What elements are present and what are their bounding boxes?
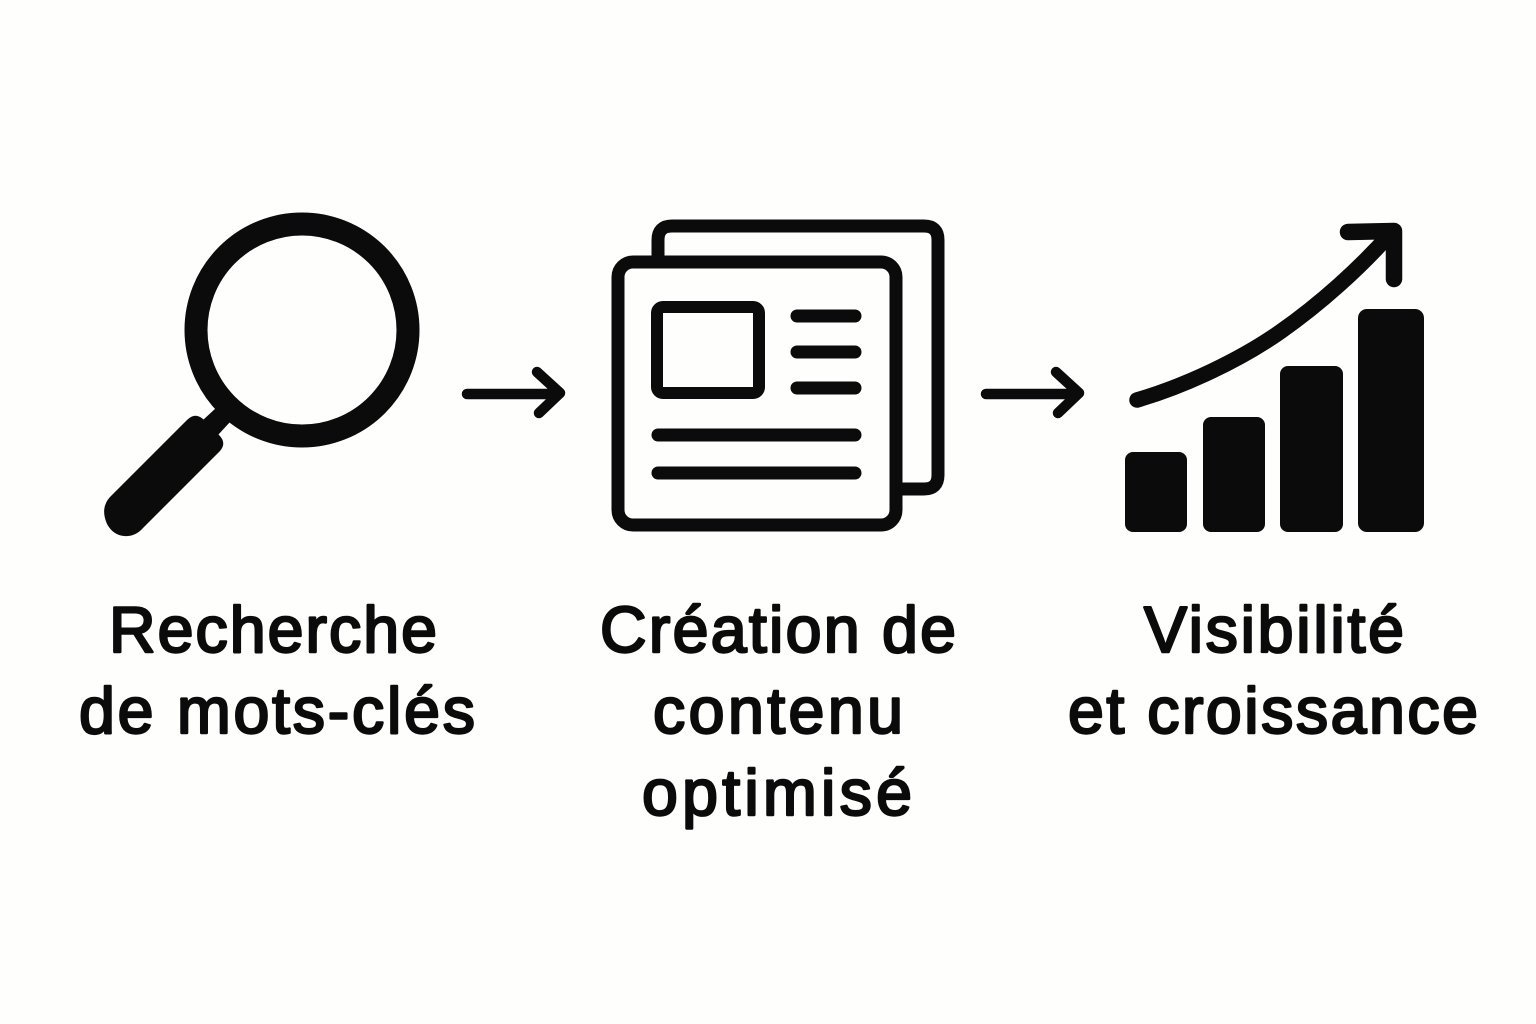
- label: Création de contenu optimisé: [600, 594, 956, 829]
- label: Visibilité et croissance: et croissance: [1068, 675, 1478, 747]
- arrow: step 2 to step 3: [986, 372, 1079, 413]
- icon: content document: [618, 226, 938, 525]
- label: Recherche de mots-clés: Recherche: [109, 594, 437, 666]
- label: Visibilité et croissance: Visibilité: [1144, 594, 1404, 666]
- arrow: step 1 to step 2: [467, 372, 560, 413]
- icon: growth bar chart: [1125, 231, 1424, 532]
- label: Création de contenu optimisé: contenu: [653, 675, 903, 747]
- label: Recherche de mots-clés: de mots-clés: [79, 675, 475, 747]
- label: Recherche de mots-clés: [79, 594, 475, 747]
- label: Création de contenu optimisé: optimisé: [642, 757, 912, 829]
- label: Visibilité et croissance: [1068, 594, 1478, 747]
- label: Création de contenu optimisé: Création de: [600, 594, 956, 666]
- icon: magnifying glass: [104, 224, 408, 536]
